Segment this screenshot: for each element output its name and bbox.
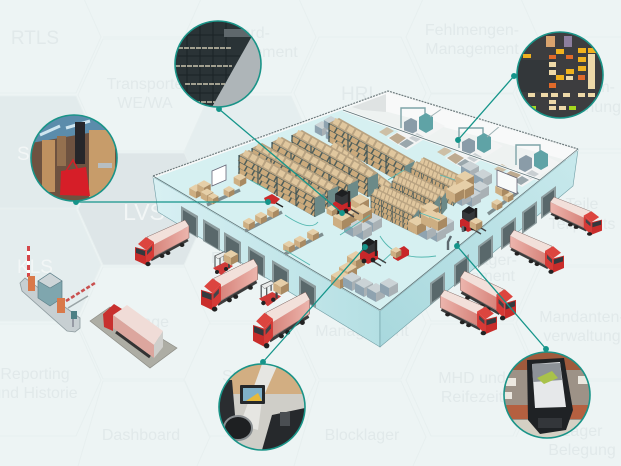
background hexagon labels: Lager-	[471, 252, 517, 269]
background hexagon labels: Lager	[562, 423, 603, 440]
background hexagon labels: planung	[564, 99, 621, 116]
pallet group near forklift	[333, 194, 382, 240]
background hexagon labels: Management	[204, 44, 298, 61]
photo circle: forklift terminal	[219, 364, 305, 450]
gate with barrier	[20, 246, 95, 332]
floor	[153, 92, 578, 311]
robot cart with carton	[391, 246, 409, 261]
trucks at right docks	[440, 197, 602, 335]
background hexagon labels: Belegung	[548, 442, 616, 459]
room corner shade	[352, 94, 386, 112]
background hexagon labels: LVS	[123, 199, 165, 225]
photo circle: handheld scanner	[504, 352, 590, 438]
front racks	[371, 139, 466, 251]
background hexagon labels: Transporte	[107, 76, 183, 93]
room back wall	[352, 93, 578, 160]
background hexagon labels: KLS	[17, 257, 53, 278]
left outer wall	[153, 177, 380, 347]
conveyor right	[488, 170, 518, 214]
background hexagon labels: SLS	[17, 144, 53, 165]
background hexagon labels: Fehlmengen-	[425, 22, 519, 39]
floor routing arrows	[250, 170, 455, 265]
background hexagon labels: MHD und	[438, 370, 506, 387]
background hexagon labels: Yard-	[232, 25, 270, 42]
background hexagon labels: HRL	[341, 84, 379, 105]
conveyors and cartons left	[189, 165, 323, 254]
background hexagon labels: WE/WA	[117, 95, 173, 112]
rim hatch	[153, 91, 578, 176]
forklifts	[264, 189, 486, 266]
dock doors	[181, 186, 556, 308]
photo circle: software dashboard	[517, 32, 603, 118]
background hexagon labels: Management	[422, 268, 516, 285]
pallet group front	[331, 251, 398, 302]
building walls rim	[153, 92, 578, 180]
outdoor forklifts	[213, 250, 289, 306]
background hexagon labels: Management	[425, 41, 519, 58]
trucks at left docks	[135, 220, 310, 348]
photo circle: paper rolls forklift	[31, 115, 117, 201]
production machines	[379, 108, 560, 187]
gray pallets back	[315, 116, 340, 142]
background hexagon labels: Teilpalets	[549, 216, 615, 233]
background hexagon labels: RTLS	[11, 28, 59, 49]
warehouse building	[153, 91, 578, 347]
background hexagon labels: Reporting	[0, 366, 70, 383]
pallet group centre	[408, 202, 454, 242]
warehouse workers	[448, 226, 463, 250]
pallet group top right	[446, 161, 492, 207]
production room	[343, 92, 578, 180]
background hexagon labels: Blocklager	[325, 427, 400, 444]
high bay racks	[239, 118, 415, 217]
right outer wall	[380, 150, 578, 347]
background hexagon labels: Dashboard	[102, 427, 180, 444]
background hexagon labels: Management	[315, 323, 409, 340]
background hexagon labels: Waage	[119, 314, 169, 331]
connector lines	[74, 74, 548, 364]
background hexagon labels: Stapler-	[222, 368, 278, 385]
background hexagon labels: Fuhrpark	[211, 250, 276, 267]
photo circle: shelving	[175, 21, 262, 107]
truck on weighbridge	[90, 304, 177, 368]
background hexagon labels: Lagerraum-	[532, 79, 615, 96]
background hexagon labels: Teile	[566, 196, 599, 213]
background hexagon labels: verwaltung	[543, 328, 621, 345]
background hexagon labels: Reifezeit	[441, 389, 504, 406]
